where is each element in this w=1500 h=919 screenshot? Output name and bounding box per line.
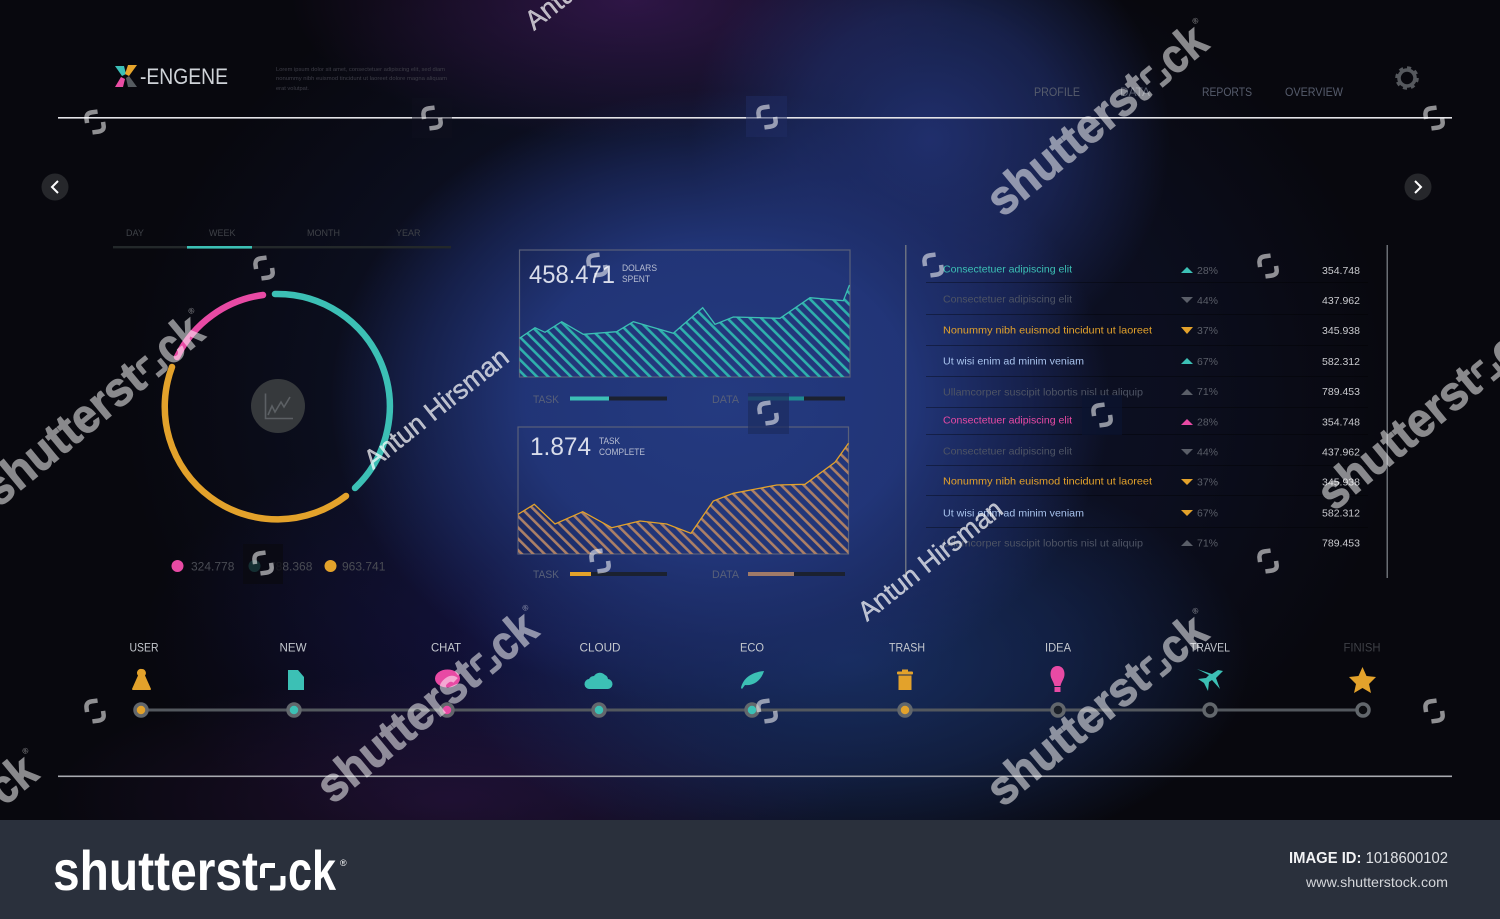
- row 1: 28%: [1197, 265, 1218, 277]
- panel: dollars spent: SPENT: [622, 274, 650, 284]
- navigation menu: [1034, 85, 1344, 99]
- donut chart: [165, 294, 390, 519]
- row 1: 354.748: [1322, 265, 1360, 277]
- watermark: shutterstock centre bottom: ck: [478, 601, 548, 672]
- row 3: 37%: [1197, 325, 1218, 337]
- progress bars: task complete: DATA: [712, 569, 740, 581]
- row 7: 44%: [1197, 446, 1218, 458]
- panel: task complete: 1.874: [530, 433, 591, 461]
- timeline labels: USER: [130, 642, 158, 654]
- panel: task complete: [518, 427, 848, 554]
- watermark: shutterstock left: [0, 299, 220, 516]
- watermark: shutterstock right bottom: ck: [1148, 604, 1218, 675]
- header description: [276, 67, 447, 92]
- header description: nonummy nibh euismod tincidunt ut laoreet dolore magna aliquam: [276, 76, 447, 82]
- row 2: [943, 294, 1360, 307]
- watermark: shutterstock right: shutterst: [1307, 356, 1491, 520]
- timeline labels: NEW: [280, 642, 307, 654]
- shutterstock logo: ®: [340, 858, 347, 868]
- panel: data table: [905, 245, 1388, 578]
- orange area chart: [518, 443, 848, 554]
- timeline labels: TRAVEL: [1190, 642, 1231, 654]
- donut legend: 324.778: [191, 560, 235, 574]
- icon: document: [288, 670, 304, 690]
- icon: star: [1349, 667, 1376, 693]
- icon: chat bubble: [435, 670, 460, 688]
- icon: settings gear: [1396, 68, 1418, 88]
- watermark: shutterstock right bottom: ®: [1190, 606, 1201, 616]
- icon: airplane: [1197, 669, 1223, 691]
- row 1: [943, 264, 1360, 277]
- watermark: shutterstock right bottom: shutterst: [976, 652, 1160, 816]
- row 10: Ullamcorper suscipit lobortis nisl ut aliquip: [943, 538, 1143, 550]
- watermark grid icons: [86, 96, 1443, 722]
- watermark: shutterstock centre bottom: [306, 596, 554, 813]
- header description: erat volutpat.: [276, 86, 309, 92]
- icon: user: [132, 669, 151, 690]
- navigation menu: PROFILE: [1034, 85, 1080, 99]
- teal area chart: [520, 285, 850, 377]
- row 3: Nonummy nibh euismod tincidunt ut laoreet: [943, 324, 1152, 336]
- panel: task complete: COMPLETE: [599, 447, 645, 457]
- row 4: Ut wisi enim ad minim veniam: [943, 356, 1084, 368]
- header description: Lorem ipsum dolor sit amet, consectetuer adipiscing elit, sed diam: [276, 67, 445, 73]
- panel: dollars spent: 458.471: [529, 261, 615, 289]
- row 8: [943, 476, 1360, 488]
- timeline labels: CLOUD: [580, 642, 620, 654]
- row 2: 44%: [1197, 295, 1218, 307]
- progress bars: task complete: TASK: [533, 569, 560, 581]
- arrow: previous: [42, 174, 68, 200]
- navigation menu: DATA: [1120, 85, 1150, 99]
- timeline labels: CHAT: [431, 642, 461, 654]
- row 8: Nonummy nibh euismod tincidunt ut laoreet: [943, 476, 1152, 488]
- panel: dollars spent: [520, 250, 850, 377]
- row 2: Consectetuer adipiscing elit: [943, 294, 1072, 306]
- arrow: next: [1404, 174, 1432, 200]
- timeline labels: TRASH: [889, 642, 925, 654]
- row 10: 789.453: [1322, 538, 1360, 550]
- row 2: 437.962: [1322, 295, 1360, 307]
- watermark: shutterstock top right: ck: [1148, 14, 1218, 85]
- timeline labels: ECO: [740, 642, 764, 654]
- donut legend: [172, 560, 386, 574]
- row 8: 345.938: [1322, 476, 1360, 488]
- row 8: 37%: [1197, 476, 1218, 488]
- progress bars: dollars spent: [533, 394, 845, 406]
- row 9: Ut wisi enim ad minim veniam: [943, 508, 1084, 520]
- timeline labels: FINISH: [1344, 642, 1380, 654]
- icon: donut centre chart: [251, 379, 305, 433]
- icon: cloud: [584, 673, 613, 689]
- row 9: 67%: [1197, 508, 1218, 520]
- row 4: 582.312: [1322, 356, 1360, 368]
- watermark: shutterstock right bottom: [976, 599, 1224, 816]
- period tabs: MONTH: [307, 228, 340, 238]
- timeline labels: IDEA: [1045, 642, 1071, 654]
- watermark: shutterstock top right: shutterst: [976, 62, 1160, 226]
- row 7: [943, 446, 1360, 458]
- panel: task complete: TASK: [599, 436, 620, 446]
- website url: www.shutterstock.com: [1305, 874, 1448, 890]
- shutterstock logo: shutterst: [53, 839, 258, 902]
- row 7: Consectetuer adipiscing elit: [943, 446, 1072, 458]
- watermark: shutterstock left: ®: [186, 306, 197, 316]
- row 5: 789.453: [1322, 386, 1360, 398]
- row 9: [943, 508, 1360, 520]
- period tabs: DAY: [126, 228, 144, 238]
- row 10: [943, 538, 1360, 550]
- period tabs: YEAR: [396, 228, 421, 238]
- row 6: [943, 414, 1360, 428]
- row 6: 28%: [1197, 416, 1218, 428]
- navigation menu: REPORTS: [1202, 85, 1252, 99]
- row 4: 67%: [1197, 356, 1218, 368]
- row 6: Consectetuer adipiscing elit: [943, 414, 1072, 426]
- watermark: shutterstock top right: ®: [1190, 16, 1201, 26]
- image id: IMAGE ID: 1018600102: [1289, 850, 1448, 867]
- watermark: author right: Antun Hirsman: [852, 494, 1008, 627]
- watermark: shutterstock centre bottom: ®: [520, 603, 531, 613]
- row 7: 437.962: [1322, 446, 1360, 458]
- watermark: shutterstock top right: [976, 9, 1224, 226]
- icon: leaf: [741, 671, 764, 689]
- navigation menu: OVERVIEW: [1285, 85, 1344, 99]
- timeline nodes: [135, 704, 1369, 716]
- icon: light bulb: [1050, 666, 1064, 692]
- row 4: [943, 356, 1360, 368]
- watermark: shutterstock left: ck: [144, 304, 214, 375]
- donut legend: 963.741: [342, 560, 386, 574]
- progress bars: task complete: [533, 569, 845, 581]
- row 9: 582.312: [1322, 508, 1360, 520]
- header rule: [58, 117, 1452, 119]
- donut legend: 788.368: [269, 560, 313, 574]
- footer bar: [0, 820, 1500, 919]
- timeline track: [135, 704, 1369, 716]
- row 1: Consectetuer adipiscing elit: [943, 264, 1072, 276]
- footer rule: [58, 776, 1452, 777]
- row 5: 71%: [1197, 386, 1218, 398]
- row 5: [943, 386, 1360, 398]
- period tabs: [113, 228, 451, 249]
- shutterstock logo: ck: [288, 839, 337, 902]
- timeline labels: [130, 642, 1380, 654]
- watermark: shutterstock centre bottom: shutterst: [306, 649, 490, 813]
- period tabs: WEEK: [209, 228, 236, 238]
- row 5: Ullamcorper suscipit lobortis nisl ut aliquip: [943, 386, 1143, 398]
- row 6: 354.748: [1322, 416, 1360, 428]
- watermark: author centre: Antun Hirsman: [358, 342, 514, 475]
- row 3: [943, 324, 1360, 337]
- progress bars: dollars spent: TASK: [533, 394, 560, 406]
- row 10: 71%: [1197, 538, 1218, 550]
- icon: trash can: [897, 670, 913, 690]
- header logo: -ENGENE: [140, 64, 228, 89]
- panel: dollars spent: DOLARS: [622, 263, 657, 273]
- watermark: shutterstock bottom left fragment: ®: [20, 746, 31, 756]
- progress bars: dollars spent: DATA: [712, 394, 740, 406]
- row 3: 345.938: [1322, 325, 1360, 337]
